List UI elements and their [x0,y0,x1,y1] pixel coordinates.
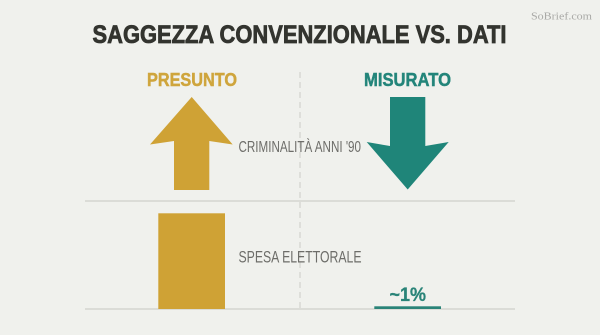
label: election spending: SPESA ELETTORALE [238,248,362,266]
heading: misurato: MISURATO [364,69,451,90]
bar: measured election spending [374,306,441,309]
icon: down arrow, measured [367,97,449,190]
heading: presunto: PRESUNTO [147,69,237,90]
bar: presumed election spending [158,213,225,309]
watermark: SoBrief.com [531,12,592,22]
icon: up arrow, presumed [150,97,233,190]
label: crime in the 90s: CRIMINALITÀ ANNI '90 [238,137,361,156]
title: SAGGEZZA CONVENZIONALE VS. DATI [92,21,506,49]
value label: about one percent: ~1% [390,284,426,306]
